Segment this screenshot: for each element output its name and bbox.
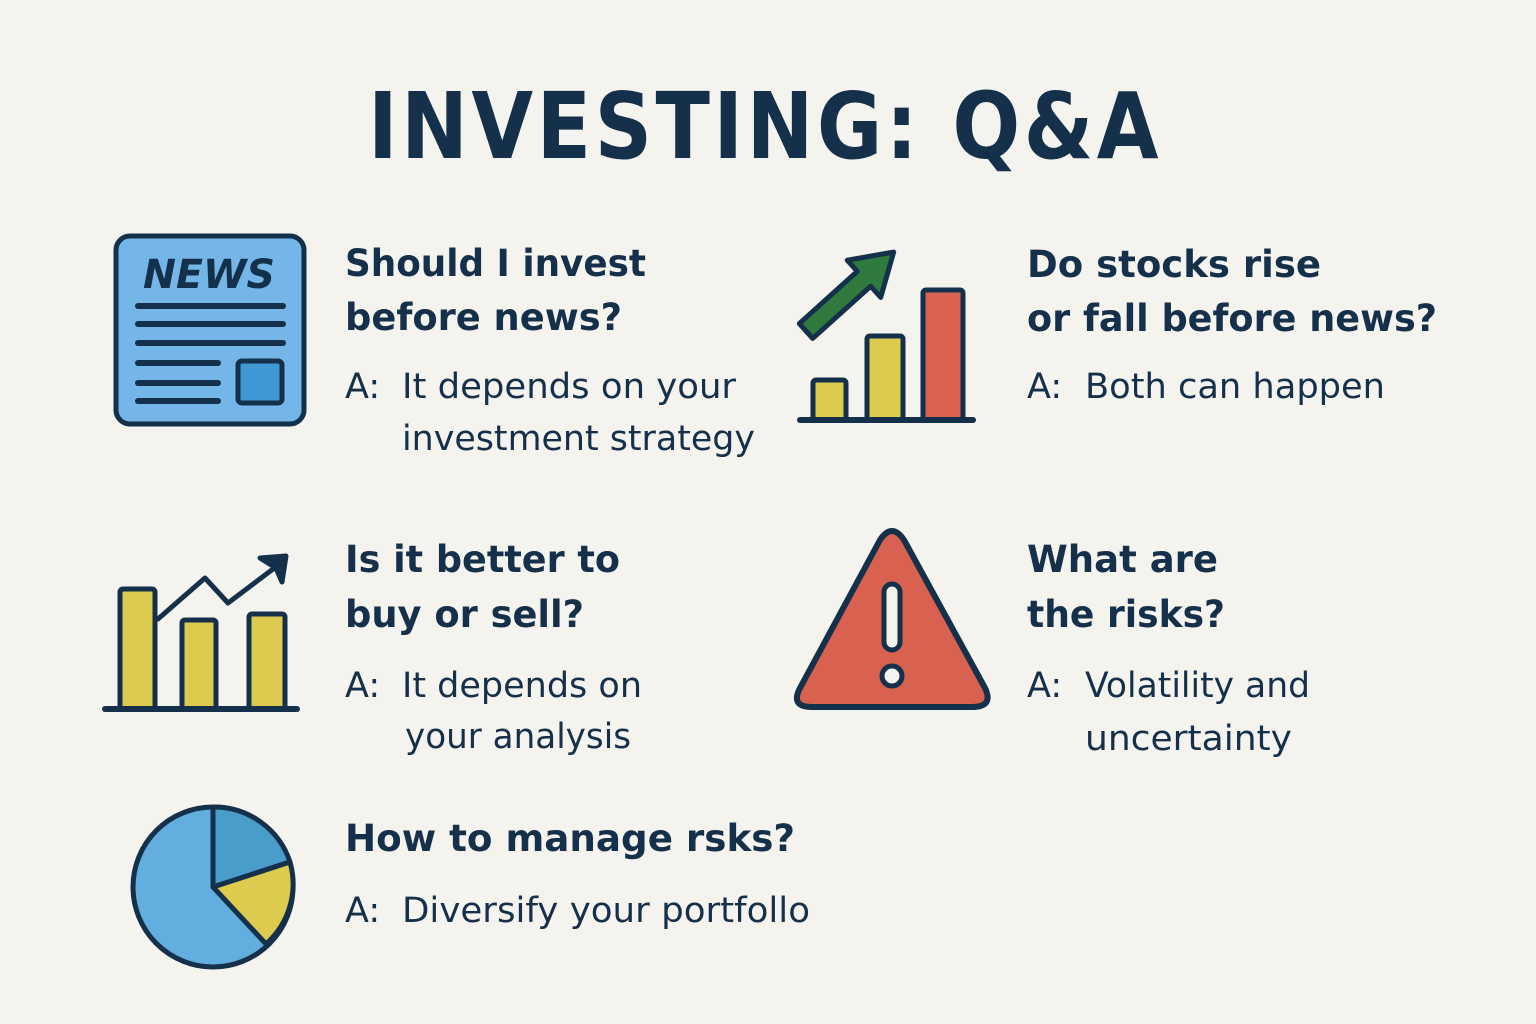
text block: Q4 bbox=[1027, 538, 1310, 759]
text block: Q4: uncertainty bbox=[1085, 719, 1292, 759]
text block: Q5: Diversify your portfollo bbox=[402, 891, 810, 931]
text block: Q2 bbox=[1027, 243, 1437, 407]
icon: warning triangle bbox=[797, 531, 988, 707]
text block: Q1: before news? bbox=[345, 296, 622, 339]
text block: Q2: or fall before news? bbox=[1027, 297, 1437, 340]
text block: Q5: A: bbox=[345, 891, 380, 931]
title: INVESTING: Q&A bbox=[368, 73, 1162, 180]
text block: Q3: Is it better to bbox=[345, 538, 620, 581]
text block: Q5 bbox=[345, 817, 810, 931]
text block: Q2: A: bbox=[1027, 367, 1062, 407]
icon: pie chart bbox=[133, 807, 293, 967]
text block: Q1 bbox=[345, 242, 755, 459]
text block: Q1: It depends on your bbox=[402, 367, 737, 407]
text block: Q1: investment strategy bbox=[402, 419, 755, 459]
text block: Q1: A: bbox=[345, 367, 380, 407]
icon: newspaper: NEWS bbox=[143, 252, 275, 298]
text block: Q4: A: bbox=[1027, 666, 1062, 706]
text block: Q3: It depends on bbox=[402, 666, 642, 706]
text block: Q2: Do stocks rise bbox=[1027, 243, 1321, 286]
icon: rising bar chart bbox=[789, 233, 973, 420]
text block: Q4: Volatility and bbox=[1085, 666, 1310, 706]
text block: Q4: What are bbox=[1027, 538, 1218, 581]
icon: newspaper bbox=[116, 236, 304, 424]
text block: Q3: A: bbox=[345, 666, 380, 706]
text block: Q3: buy or sell? bbox=[345, 593, 584, 636]
text block: Q3: your analysis bbox=[405, 717, 631, 757]
text block: Q1: Should I invest bbox=[345, 242, 646, 285]
text block: Q2: Both can happen bbox=[1085, 367, 1385, 407]
text block: Q5: How to manage rsks? bbox=[345, 817, 795, 860]
text block: Q4: the risks? bbox=[1027, 593, 1225, 636]
text block: Q3 bbox=[345, 538, 642, 757]
icon: bar chart with trend line bbox=[105, 556, 297, 709]
